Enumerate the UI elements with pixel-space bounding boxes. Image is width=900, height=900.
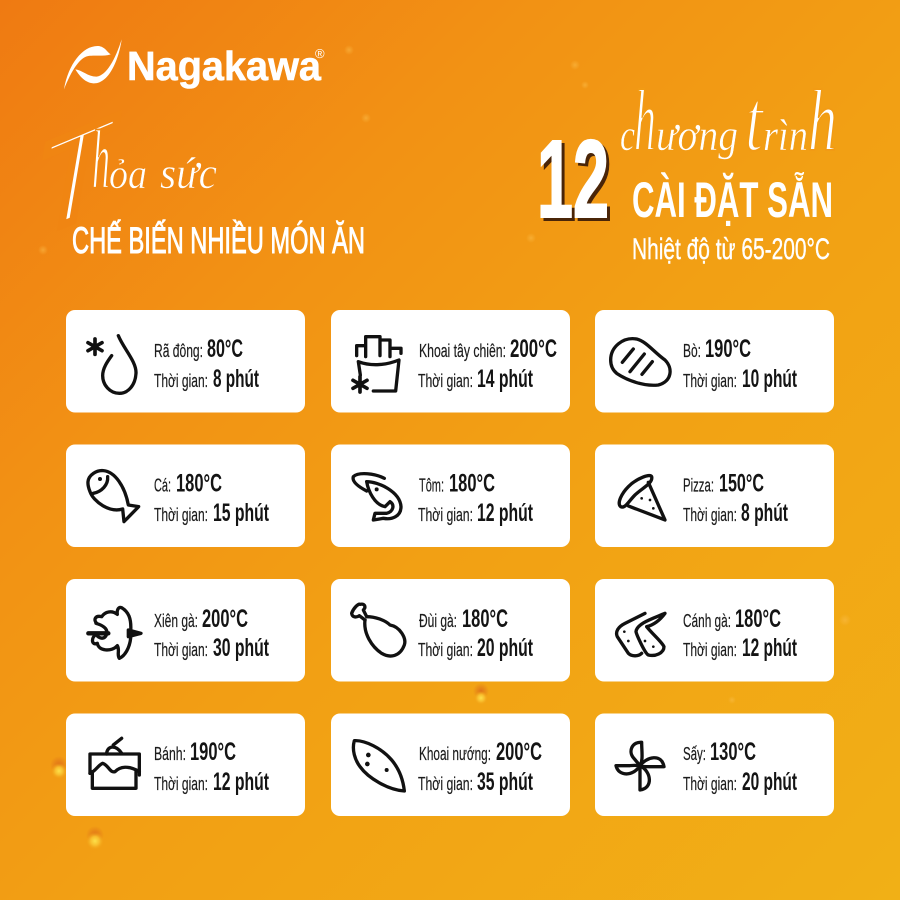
- text: 14 phút: [477, 365, 533, 393]
- icon: fan: [616, 742, 664, 790]
- text: Cánh gà:: [683, 611, 731, 631]
- text: Thời gian:: [418, 371, 473, 391]
- text: 180°C: [176, 470, 222, 498]
- icon: logo swoosh: [64, 39, 122, 89]
- text: 10 phút: [742, 365, 797, 393]
- icon: pizza: [619, 476, 665, 520]
- text: 80°C: [207, 335, 243, 363]
- text: 35 phút: [477, 768, 533, 796]
- card: Bò: [595, 310, 834, 412]
- text: Thời gian:: [154, 774, 208, 794]
- card: Xiên gà: [66, 579, 305, 682]
- text: Xiên gà:: [154, 611, 198, 631]
- card: Khoai nướng: [331, 714, 570, 816]
- script title: sức: [160, 149, 217, 198]
- number 12 shadow: 12: [540, 121, 612, 244]
- card: Rã đông: [66, 310, 305, 412]
- icon: defrost drop: [88, 336, 136, 393]
- text: [683, 738, 797, 796]
- text: Thời gian:: [683, 774, 737, 794]
- text: 130°C: [710, 738, 756, 766]
- text: Thời gian:: [418, 640, 473, 660]
- text: Tôm:: [419, 476, 444, 496]
- text: 15 phút: [213, 499, 269, 527]
- number 12: 12: [537, 118, 609, 241]
- text: [418, 738, 542, 796]
- text: [418, 605, 533, 662]
- text: [683, 605, 797, 662]
- script title: rìn: [763, 111, 808, 160]
- card: Cá: [66, 444, 305, 547]
- script title: h: [634, 73, 656, 170]
- card: Cánh gà: [595, 579, 834, 682]
- text: [683, 470, 788, 527]
- text: Thời gian:: [154, 505, 208, 525]
- text: 20 phút: [742, 768, 797, 796]
- card: Tôm: [331, 444, 570, 547]
- icon: sweet potato: [353, 741, 404, 791]
- icon: fish: [88, 471, 139, 522]
- text: Thời gian:: [683, 640, 737, 660]
- text: Khoai nướng:: [419, 744, 491, 764]
- registered mark: ®: [315, 46, 325, 61]
- icon: fries: [353, 337, 401, 392]
- text: Thời gian:: [418, 505, 473, 525]
- icon: chicken skewer: [88, 607, 141, 658]
- script title: ương: [656, 111, 738, 160]
- text: Rã đông:: [154, 341, 203, 361]
- text: 200°C: [510, 335, 557, 363]
- text: Đùi gà:: [419, 611, 457, 631]
- text: [154, 738, 269, 796]
- text: Thời gian:: [154, 640, 208, 660]
- script title: ỏa: [109, 152, 147, 198]
- text: 150°C: [719, 470, 764, 498]
- text: 30 phút: [213, 634, 269, 662]
- text: 8 phút: [213, 365, 259, 393]
- text: 200°C: [496, 738, 542, 766]
- text: [154, 470, 269, 527]
- text: Thời gian:: [154, 371, 208, 391]
- text: Bò:: [683, 341, 701, 361]
- text: Bánh:: [154, 744, 186, 764]
- text: 12 phút: [742, 634, 797, 662]
- script title: T: [25, 85, 125, 268]
- text: Thời gian:: [418, 774, 473, 794]
- text: 190°C: [705, 335, 751, 363]
- text: 20 phút: [477, 634, 533, 662]
- text: 12 phút: [213, 768, 269, 796]
- script title: t: [745, 73, 765, 170]
- text: 180°C: [735, 605, 781, 633]
- card: Sấy: [595, 714, 834, 816]
- text: [154, 335, 259, 393]
- card: Bánh: [66, 714, 305, 816]
- card: Khoai tây chiên: [331, 310, 570, 412]
- icon: beef steak: [611, 339, 670, 385]
- text: [418, 470, 533, 527]
- script title: c: [620, 111, 635, 160]
- text: 8 phút: [741, 499, 788, 527]
- text: Khoai tây chiên:: [419, 341, 506, 361]
- text: 12 phút: [477, 499, 533, 527]
- text: [418, 335, 557, 393]
- subtitle: CHẾ BIẾN NHIỀU MÓN ĂN: [72, 220, 365, 261]
- text: Pizza:: [683, 476, 714, 496]
- text: 180°C: [449, 470, 495, 498]
- script title: h: [92, 114, 110, 207]
- logo: Nagakawa: [64, 39, 325, 89]
- card: Đùi gà: [331, 579, 570, 682]
- icon: cake: [90, 738, 139, 788]
- script title: [25, 85, 217, 268]
- text: Cá:: [154, 476, 171, 496]
- text: [154, 605, 269, 662]
- heading: right: [537, 73, 837, 266]
- heading: left: [25, 85, 365, 268]
- brand name: Nagakawa: [127, 43, 322, 89]
- text: Thời gian:: [683, 505, 737, 525]
- text: 200°C: [202, 605, 248, 633]
- text: [683, 335, 797, 393]
- card: Pizza: [595, 444, 834, 547]
- script title: h: [808, 73, 837, 170]
- text: 180°C: [462, 605, 508, 633]
- icon: drumstick: [352, 604, 405, 656]
- icon: chicken wings: [617, 613, 665, 656]
- text: 190°C: [190, 738, 236, 766]
- icon: shrimp: [353, 474, 401, 520]
- text: Thời gian:: [683, 371, 737, 391]
- text: Sấy:: [683, 744, 706, 764]
